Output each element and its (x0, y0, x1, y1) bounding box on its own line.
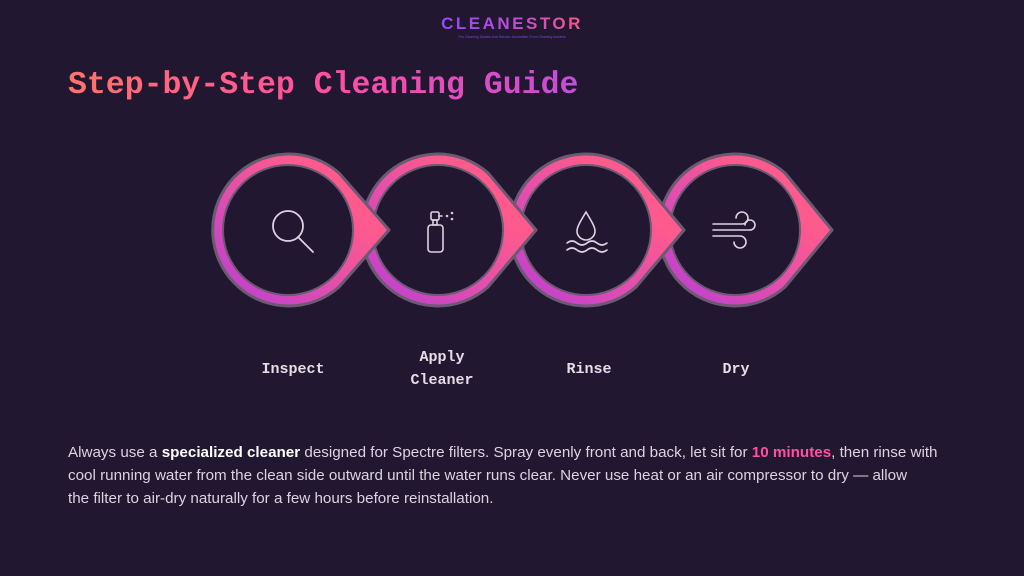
label: dry: Dry (722, 361, 750, 378)
label: rinse: Rinse (566, 361, 612, 378)
label: apply cleaner: Cleaner (410, 372, 474, 389)
logo: Pro Cleaning Guides And Service Journalism From Cleaning Insiders (458, 35, 566, 39)
label: apply cleaner (410, 349, 474, 389)
icon: magnifier (273, 211, 313, 252)
icon: spray bottle (428, 212, 452, 252)
description text: cool running water from the clean side outward until the water runs clear. Never use heat or an air compressor to dry — allow (68, 467, 907, 484)
description text: the filter to air-dry naturally for a few hours before reinstallation. (68, 490, 493, 507)
icon: wind (713, 212, 755, 248)
description text (68, 444, 938, 507)
step 3: rinse (510, 154, 684, 306)
label: inspect: Inspect (261, 361, 324, 378)
logo: CLEANESTOR (441, 14, 583, 33)
icon: water drop (567, 212, 607, 252)
step 2: apply cleaner (362, 154, 536, 306)
label: apply cleaner: Apply (419, 349, 464, 366)
step 1: inspect (213, 154, 389, 306)
step 4: dry (659, 154, 832, 306)
description text: Always use a specialized cleaner designed for Spectre filters. Spray evenly front and back, let sit for 10 minutes, then rinse with (68, 444, 938, 461)
title: Step-by-Step Cleaning Guide (68, 68, 578, 103)
